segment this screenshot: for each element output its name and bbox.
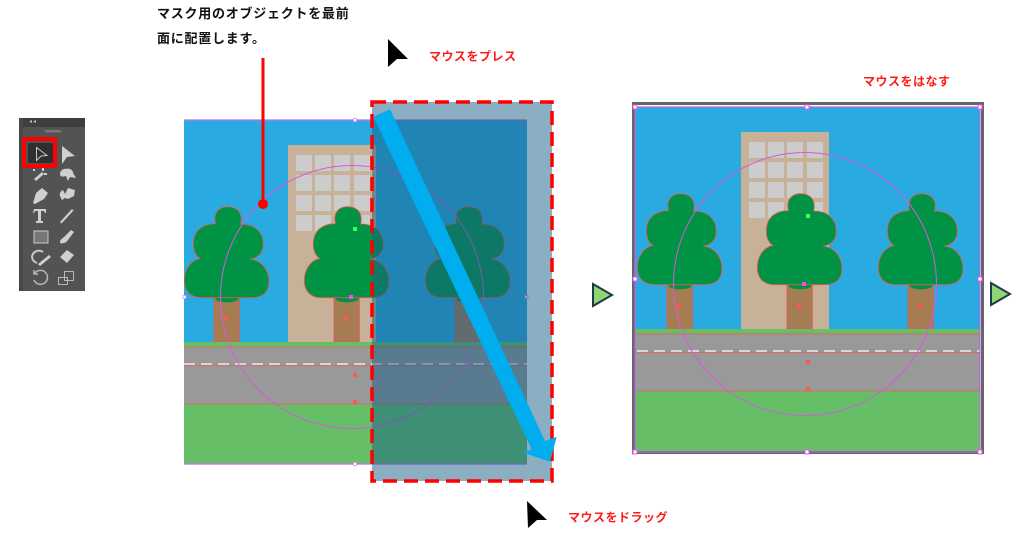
artwork before mask <box>183 118 528 466</box>
instruction text: 面に配置します。 <box>157 31 266 46</box>
drag arrow <box>373 109 557 462</box>
tool panel <box>19 118 85 291</box>
instruction text: マスク用のオブジェクトを最前 <box>157 6 350 21</box>
drag rectangle <box>372 102 552 481</box>
tool icons <box>32 146 76 266</box>
cursor: press <box>388 39 408 67</box>
label: release: マウスをはなす <box>863 74 951 88</box>
cursor: drag <box>527 501 547 528</box>
leader line to mask object <box>258 58 268 209</box>
step arrow 1 <box>593 284 612 306</box>
instruction text <box>157 6 350 46</box>
label: drag: マウスをドラッグ <box>568 510 668 524</box>
selected tool highlight <box>24 139 55 166</box>
step arrow 2 <box>991 283 1010 305</box>
label: press: マウスをプレス <box>429 50 517 64</box>
artwork after mask <box>633 104 982 454</box>
